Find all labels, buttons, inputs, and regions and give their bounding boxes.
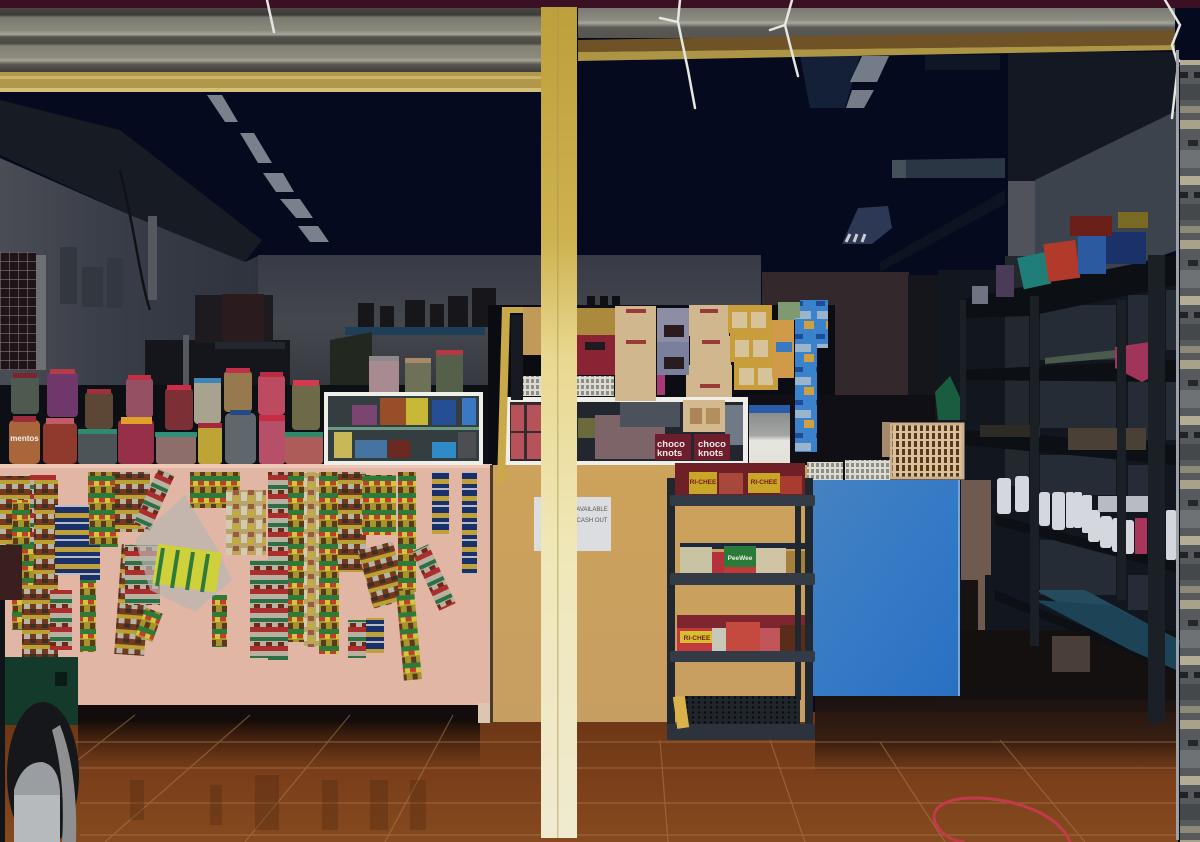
choco knots packs xyxy=(657,439,726,459)
left wall window grille xyxy=(0,252,46,370)
red hose loop on floor xyxy=(934,798,1070,842)
hanging chip packs above display xyxy=(497,296,828,484)
RI-CHEE snacks top shelf xyxy=(675,463,805,495)
black plastic shelving rack xyxy=(667,463,815,740)
candy jars on counter xyxy=(9,350,463,464)
middle shelf packets xyxy=(1045,342,1150,382)
wooden counter panel xyxy=(493,465,811,722)
roller shutter right xyxy=(578,8,1175,61)
wall posters xyxy=(60,247,123,308)
floor reflections xyxy=(130,775,426,830)
rack frame xyxy=(667,478,815,740)
paper notice xyxy=(534,497,611,551)
top maroon fascia xyxy=(0,0,1200,8)
right metal shelving with stock xyxy=(960,212,1180,723)
panels between shelving xyxy=(1040,290,1176,610)
RI-CHEE snacks top shelf: RI-CHEE xyxy=(751,479,778,486)
cream coffee packs xyxy=(615,305,732,401)
jar: bottom row xyxy=(9,410,323,464)
ceiling fan xyxy=(842,206,892,244)
RI-CHEE snacks lower shelf: RI-CHEE xyxy=(684,635,711,642)
shelf boards xyxy=(960,255,1176,672)
choco knots packs: choco xyxy=(657,439,685,450)
ceiling fluorescent lights xyxy=(207,95,329,242)
bottles above pack rail xyxy=(587,296,620,308)
gold snack packs xyxy=(728,305,778,390)
blue metal cabinet xyxy=(813,480,960,696)
paper notice: AVAILABLE xyxy=(576,507,608,513)
pink counter xyxy=(0,464,493,723)
RI-CHEE snacks top shelf: RI-CHEE xyxy=(690,479,717,486)
glass display case left xyxy=(324,392,483,465)
yellow central pillar xyxy=(541,7,577,838)
RI-CHEE snacks lower shelf xyxy=(677,615,807,652)
Pee Wee snacks middle shelf: PeeWee xyxy=(728,555,753,562)
white plastic tub with blue lid xyxy=(749,405,790,464)
jar label: mentos: mentos xyxy=(10,434,39,443)
right stone column xyxy=(1176,50,1200,842)
hanging snack sachets on pink counter xyxy=(0,469,477,681)
tiled floor xyxy=(0,630,1178,842)
jar: top row xyxy=(11,368,320,430)
yellow frame rail xyxy=(497,307,523,484)
roller shutter left xyxy=(0,7,543,92)
hanging snack pack on case xyxy=(683,400,725,432)
choco knots packs: choco xyxy=(698,439,726,450)
back wall shelf xyxy=(330,288,496,392)
back and side walls xyxy=(0,110,1178,722)
paper notice: CASH OUT xyxy=(576,518,608,524)
motorbike wheel xyxy=(0,600,79,842)
top shelf stock xyxy=(972,212,1148,304)
dim boxes on third shelf xyxy=(980,425,1146,450)
bottom shelf packs xyxy=(1035,590,1180,672)
tan and white baskets on cabinet xyxy=(807,376,966,480)
steel uprights xyxy=(960,255,1165,723)
white bottles xyxy=(997,476,1176,560)
choco knots packs: knots xyxy=(657,448,682,459)
dark back counter behind products xyxy=(0,385,500,467)
white hanging wires xyxy=(267,0,1200,118)
glass display case right xyxy=(505,397,748,465)
left back shelf unit xyxy=(145,294,290,395)
green crate at left xyxy=(3,657,78,725)
Pee Wee snacks middle shelf xyxy=(680,543,810,574)
choco knots packs: knots xyxy=(698,448,723,459)
plastic bag of sachets xyxy=(135,495,232,612)
electric cable xyxy=(120,170,150,310)
jars behind display case xyxy=(369,350,463,392)
corrugated roof skylight xyxy=(800,56,889,108)
cardboard box beside cabinet xyxy=(961,480,991,630)
